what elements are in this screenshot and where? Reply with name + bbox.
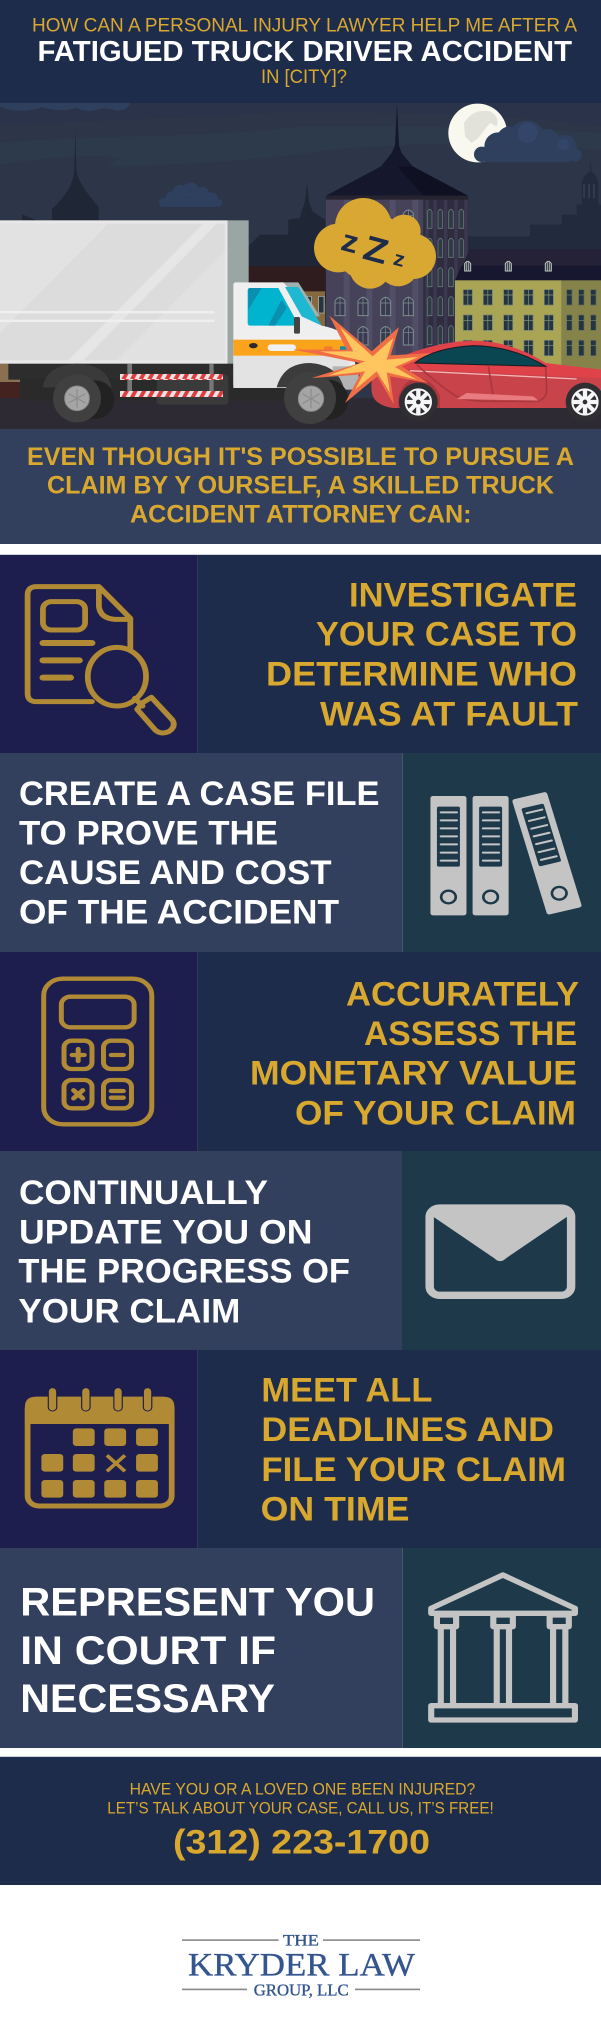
icon: cloud top left [0, 103, 131, 111]
logo: The Kryder Law Group: KRYDER LAW [188, 1948, 416, 1984]
icon: collision burst [293, 316, 432, 405]
text: investigate: DETERMINE WHO [266, 655, 577, 693]
panel: header [0, 0, 601, 103]
text: deadlines: ON TIME [261, 1491, 409, 1529]
icon: sleep thought bubble: z [391, 247, 408, 272]
call to action line one: HAVE YOU OR A LOVED ONE BEEN INJURED? [130, 1779, 475, 1798]
logo: The Kryder Law Group: GROUP, LLC [254, 1981, 349, 2000]
text: progress updates [18, 1174, 350, 1330]
intro line two: CLAIM BY Y OURSELF, A SKILLED TRUCK [47, 473, 554, 500]
panel: progress updates [0, 1151, 601, 1350]
truck cab [280, 282, 320, 316]
icon: courthouse [431, 1575, 575, 1720]
text: assess value: MONETARY VALUE [250, 1054, 577, 1092]
illustration: red car [371, 341, 601, 421]
panel: deadlines [0, 1350, 601, 1548]
text: case file: CAUSE AND COST [19, 854, 332, 892]
phone number: (312) 223-1700 [173, 1824, 430, 1862]
text: assess value: OF YOUR CLAIM [295, 1094, 576, 1132]
icon: cloud near moon [474, 121, 582, 162]
text: deadlines: DEADLINES AND [261, 1411, 554, 1449]
icon: sleep thought bubble: Z [359, 228, 392, 272]
text: deadlines: FILE YOUR CLAIM [261, 1451, 566, 1489]
text: investigate: WAS AT FAULT [320, 696, 578, 734]
panel: investigate [0, 555, 601, 753]
title line one: HOW CAN A PERSONAL INJURY LAWYER HELP ME AFTER A [32, 14, 578, 36]
icon: binders [430, 792, 582, 915]
title line three: IN [CITY]? [261, 66, 347, 88]
panel: case file [0, 753, 601, 952]
text: case file: TO PROVE THE [19, 814, 278, 852]
road [0, 364, 601, 429]
text: investigate: YOUR CASE TO [316, 616, 577, 654]
panel: assess value [0, 952, 601, 1151]
text: represent in court: NECESSARY [20, 1677, 275, 1721]
text: progress updates: THE PROGRESS OF [18, 1252, 350, 1290]
illustration: truck crash at night [0, 103, 601, 429]
icon: small cloud [159, 182, 222, 207]
text: investigate [266, 577, 578, 734]
text: represent in court [20, 1581, 375, 1721]
icon: envelope [430, 1208, 571, 1295]
icon: sleep thought bubble: z [338, 223, 363, 260]
text: assess value: ASSESS THE [364, 1015, 577, 1053]
text: deadlines: MEET ALL [261, 1372, 432, 1410]
panel: call to action [0, 1757, 601, 1885]
text: assess value [250, 976, 579, 1132]
logo: The Kryder Law Group: THE [283, 1933, 319, 1950]
panel: represent in court [0, 1548, 601, 1748]
text: deadlines [261, 1372, 566, 1529]
text: case file [19, 775, 380, 931]
skyline: distant silhouettes [22, 130, 601, 328]
text: progress updates: UPDATE YOU ON [19, 1213, 312, 1251]
panel: intro statement [0, 429, 601, 544]
text: case file: OF THE ACCIDENT [19, 893, 339, 931]
text: progress updates: CONTINUALLY [19, 1174, 268, 1212]
building: yellow apartments [455, 249, 601, 370]
text: assess value: ACCURATELY [346, 976, 579, 1014]
call to action line two: LET’S TALK ABOUT YOUR CASE, CALL US, IT’S FREE! [107, 1798, 494, 1817]
text: investigate: INVESTIGATE [349, 577, 577, 615]
building: tall tower [326, 103, 468, 359]
icon: sleep thought bubble [314, 198, 436, 289]
intro line one: EVEN THOUGH IT'S POSSIBLE TO PURSUE A [27, 444, 574, 471]
icon: calendar [25, 1388, 174, 1506]
intro line three: ACCIDENT ATTORNEY CAN: [130, 502, 471, 528]
icon: calculator [44, 979, 152, 1124]
icon: moon [448, 104, 507, 162]
title line two: FATIGUED TRUCK DRIVER ACCIDENT [38, 36, 573, 68]
text: progress updates: YOUR CLAIM [18, 1292, 240, 1330]
illustration: truck [0, 220, 359, 424]
text: represent in court: REPRESENT YOU [20, 1581, 375, 1625]
icon: document and magnifier [28, 587, 174, 733]
text: case file: CREATE A CASE FILE [19, 775, 380, 813]
logo: The Kryder Law Group [182, 1933, 420, 2000]
text: represent in court: IN COURT IF [20, 1629, 276, 1673]
